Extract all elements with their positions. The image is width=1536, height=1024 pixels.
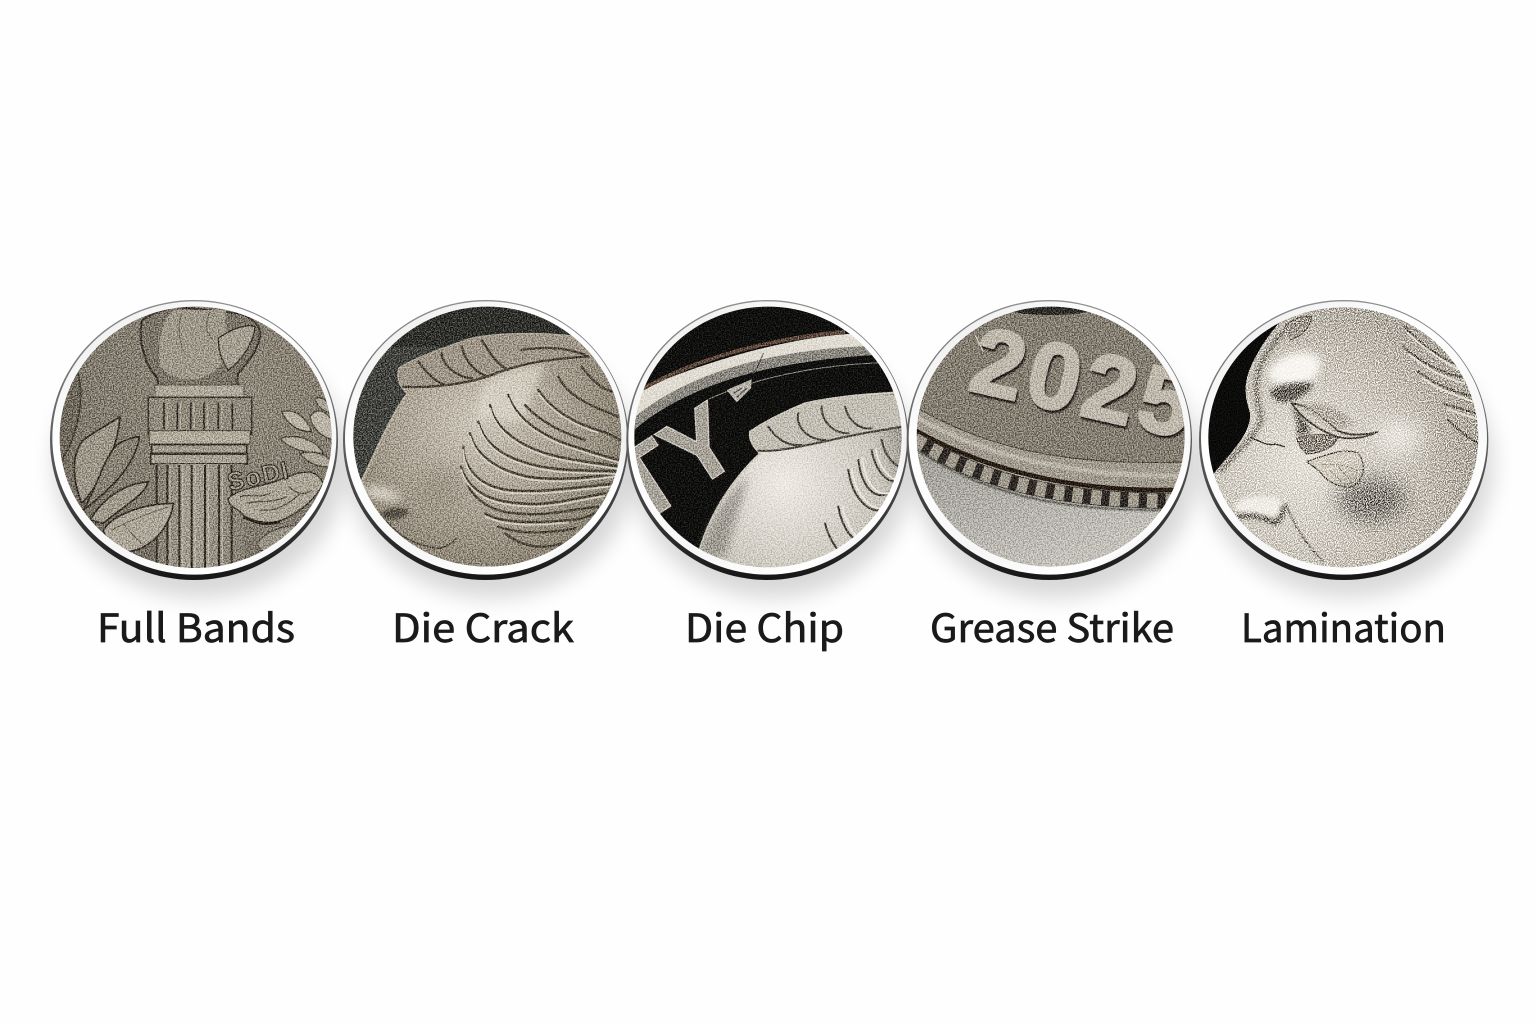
label: Grease Strike: Grease Strike — [930, 598, 1174, 654]
coin shadow — [347, 330, 635, 598]
coin: torch column — [50, 300, 340, 580]
coin shadow — [1202, 330, 1494, 598]
coin: 2025 date and reeded edge — [905, 300, 1207, 580]
label: Lamination: Lamination — [1241, 598, 1446, 654]
label: Die Crack: Die Crack — [392, 598, 574, 654]
coin shadow — [911, 330, 1199, 598]
label: Die Chip: Die Chip — [685, 598, 844, 654]
panel: Die Crack — [343, 300, 635, 654]
coin shadow — [54, 330, 346, 598]
coin: hair relief with die crack — [343, 300, 632, 580]
panel: Die Chip — [622, 300, 918, 652]
label: Full Bands: Full Bands — [97, 598, 295, 654]
coin: 2025 date and reeded edge: 2025 — [962, 307, 1207, 459]
coin: torch column: SoDI — [225, 456, 292, 497]
coin: rim, letters and die chip: TY — [590, 382, 758, 545]
coin: rim, letters and die chip — [626, 300, 908, 580]
coin: face profile with lamination flake — [1199, 300, 1488, 580]
panel: Lamination — [1199, 300, 1494, 654]
coin shadow — [630, 330, 914, 598]
panel: Grease Strike — [905, 300, 1207, 654]
panel: Full Bands — [50, 300, 346, 654]
